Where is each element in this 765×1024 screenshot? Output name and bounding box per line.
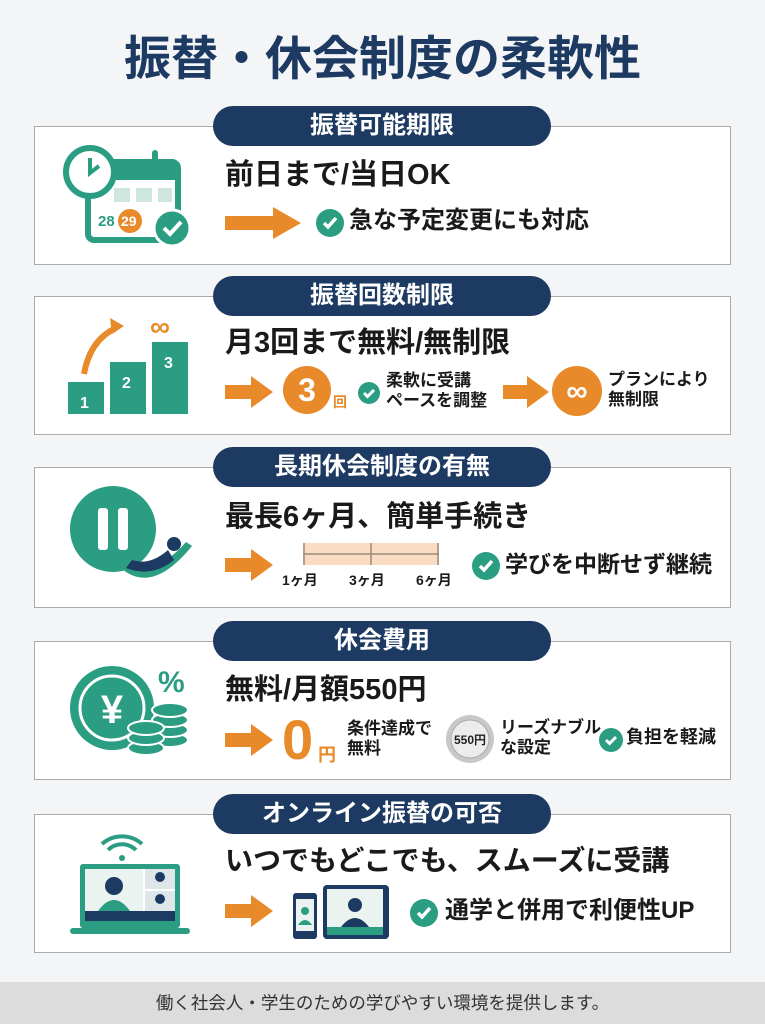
icon: phone and tablet (293, 885, 389, 939)
icon: clock calendar: 29 (121, 213, 137, 229)
callout: 無制限: 無制限 (608, 390, 659, 409)
text: リーズナブルな設定: リーズナブル (500, 718, 601, 737)
footer: 働く社会人・学生のための学びやすい環境を提供します。 (156, 993, 609, 1013)
arrow (225, 549, 273, 581)
title: 振替・休会制度の柔軟性 (124, 32, 641, 85)
text: 条件達成で無料: 無料 (347, 739, 381, 758)
callout: 3回: 回 (333, 394, 347, 410)
callout: 急な予定変更にも対応: 急な予定変更にも対応 (349, 207, 589, 234)
badge: 長期休会制度の有無: 長期休会制度の有無 (274, 453, 490, 480)
callout: 無制限 (552, 366, 710, 416)
badge: 休会費用: 休会費用 (334, 627, 430, 654)
icon: steps: 3 (164, 355, 173, 372)
panel: 長期休会制度の有無 (34, 467, 731, 608)
arrow (225, 724, 273, 756)
callout: 3回 (283, 366, 347, 414)
panel: オンライン振替の可否 (34, 814, 731, 953)
badge: 振替回数制限: 振替回数制限 (310, 282, 454, 309)
callout: 学びを中断せず継続: 学びを中断せず継続 (505, 551, 712, 577)
callout: 0円: 0 (282, 708, 313, 771)
text: 条件達成で無料 (347, 719, 432, 758)
heading: 月3回まで無料/無制限: 月3回まで無料/無制限 (225, 327, 510, 359)
icon: yen coins: % (158, 666, 185, 699)
icon: yen coins (70, 666, 187, 754)
heading: 前日まで/当日OK: 前日まで/当日OK (225, 159, 451, 191)
arrow (225, 207, 301, 239)
text: リーズナブルな設定 (500, 718, 601, 757)
chart: timeline (282, 543, 452, 588)
icon: steps: ∞ (150, 311, 170, 342)
icon: clock calendar (63, 145, 188, 244)
callout: 柔軟に受講ペースを調整: 柔軟に受講 (386, 371, 471, 390)
chart: timeline: 6ヶ月 (416, 572, 452, 588)
callout: 通学と併用で利便性UP: 通学と併用で利便性UP (445, 897, 694, 924)
icon: 550円 coin (446, 715, 494, 763)
text: 条件達成で無料: 条件達成で (347, 719, 432, 738)
heading: 無料/月額550円: 無料/月額550円 (225, 674, 426, 706)
callout: 無制限: ∞ (566, 375, 588, 408)
badge: オンライン振替の可否 (213, 794, 551, 834)
panel: 振替可能期限 (34, 126, 731, 265)
callout: 柔軟に受講ペースを調整: ペースを調整 (386, 391, 487, 410)
icon: laptop video call (70, 834, 190, 934)
callout: 負担を軽減 (599, 727, 716, 752)
chart: timeline: 3ヶ月 (349, 572, 385, 588)
heading: 最長6ヶ月、簡単手続き: 最長6ヶ月、簡単手続き (225, 501, 531, 533)
heading: いつでもどこでも、スムーズに受講: いつでもどこでも、スムーズに受講 (225, 845, 669, 876)
badge: 長期休会制度の有無 (213, 447, 551, 487)
icon: yen coins: ¥ (101, 688, 124, 732)
chart: timeline: 1ヶ月 (282, 572, 318, 588)
icon: clock calendar: 28 (98, 213, 115, 230)
arrow (225, 895, 273, 927)
badge: 振替可能期限: 振替可能期限 (310, 112, 454, 139)
icon: steps: 1 (80, 395, 89, 412)
badge: 振替回数制限 (213, 276, 551, 316)
icon: steps (68, 311, 188, 414)
callout: 柔軟に受講ペースを調整 (358, 371, 487, 410)
callout: 0円 (282, 708, 336, 771)
arrow (225, 376, 273, 408)
panel: 休会費用 (34, 641, 731, 780)
callout: 無制限: プランにより (608, 370, 710, 389)
badge: オンライン振替の可否: オンライン振替の可否 (262, 800, 502, 827)
panel: 振替回数制限 (34, 296, 731, 435)
badge: 振替可能期限 (213, 106, 551, 146)
icon: pause hammock (70, 486, 192, 578)
icon: 550円 coin: 550円 (454, 733, 486, 747)
callout: 3回: 3 (298, 372, 316, 408)
badge: 休会費用 (213, 621, 551, 661)
footer (0, 982, 765, 1024)
icon: steps: 2 (122, 375, 131, 392)
text: リーズナブルな設定: な設定 (500, 738, 551, 757)
callout: 0円: 円 (318, 745, 336, 765)
callout: 負担を軽減: 負担を軽減 (626, 727, 716, 747)
arrow (503, 376, 549, 408)
